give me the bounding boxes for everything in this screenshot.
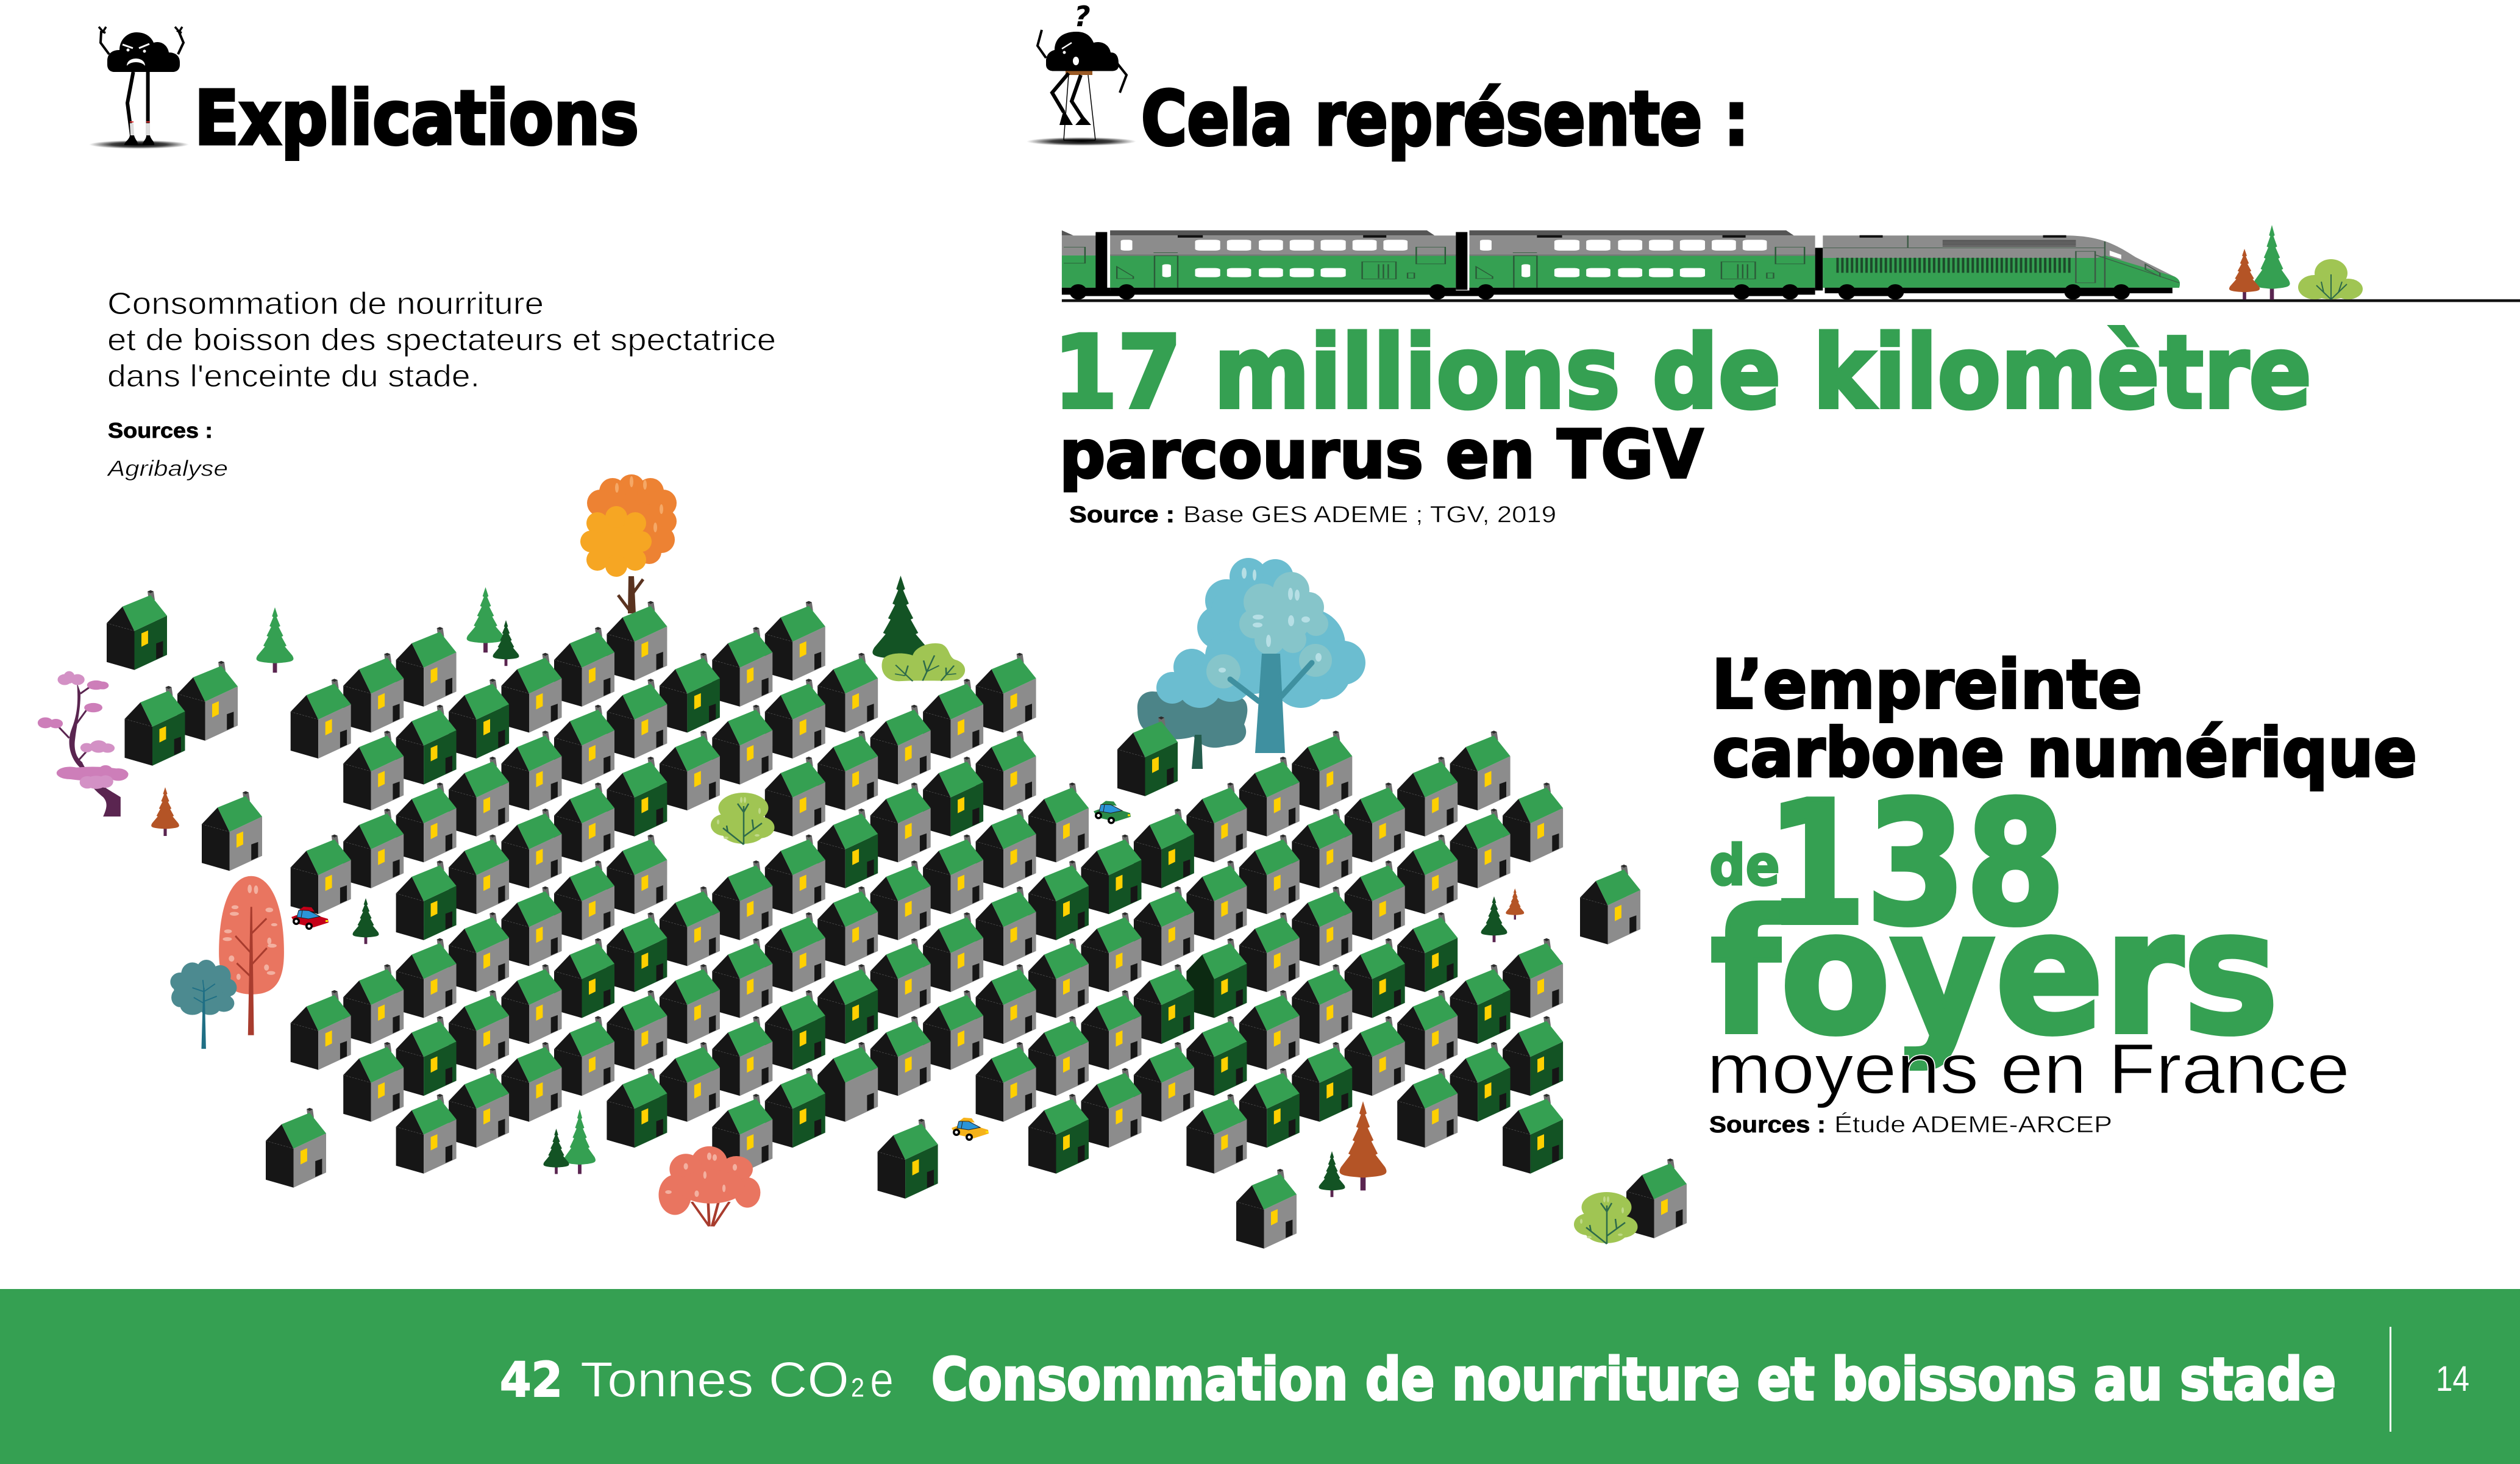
footer: value: 42: [500, 1353, 563, 1408]
source: TGV: [1069, 502, 1556, 528]
footer bar: [0, 1289, 2520, 1464]
source: ADEME-ARCEP: [1709, 1112, 2112, 1138]
character: questioning cloud: ?: [1074, 0, 1091, 33]
footer: value: e: [870, 1352, 894, 1407]
heading: L'empreinte carbone numérique: carbone numérique: [1712, 714, 2417, 793]
text block: explanation: Consommation de nourriture: [107, 286, 544, 321]
car: green: [1094, 801, 1131, 824]
subheading: moyens en France: moyens en France: [1707, 1029, 2350, 1109]
tree: orange: [580, 474, 677, 613]
heading: L'empreinte carbone numérique: L’empreinte: [1712, 646, 2142, 724]
tree: pink bonsai: [38, 671, 128, 816]
text block: explanation: [107, 286, 776, 480]
footer: page number: 14: [2436, 1359, 2469, 1399]
big number: de 138 foyers: 138: [1767, 765, 2065, 963]
source: ADEME-ARCEP: Sources :: [1709, 1112, 1826, 1138]
text block: explanation: et de boisson des spectateurs et spectatrice: [107, 322, 776, 357]
bush: green bottom right: [1574, 1192, 1637, 1244]
village: trees behind houses: [151, 474, 1524, 1197]
village: isolated houses: [107, 590, 1640, 944]
character: questioning cloud: [1027, 0, 1136, 146]
footer: value: [500, 1352, 894, 1408]
bush: green behind dark pine: [882, 643, 965, 681]
heading: Cela représente: Cela représente :: [1141, 76, 1749, 162]
village: house grid: [266, 601, 1687, 1249]
bush by the train: [2298, 259, 2363, 299]
text block: explanation: dans l'enceinte du stade.: [107, 359, 480, 393]
bush: coral: [658, 1146, 760, 1226]
big number: de 138 foyers: [1709, 765, 2279, 1072]
bush: green in the village gap: [711, 793, 774, 844]
car: yellow: [952, 1118, 989, 1141]
text block: explanation: Agribalyse: [107, 456, 228, 480]
footer: value: 2: [851, 1373, 864, 1402]
character: angry cloud: [89, 27, 189, 149]
footer: value: Tonnes CO: [580, 1352, 849, 1407]
source: TGV: Source :: [1069, 502, 1175, 528]
train illustration: [1062, 230, 2520, 302]
tree: teal: [170, 960, 237, 1049]
big number: de 138 foyers: de: [1709, 833, 1780, 898]
source: TGV: Base GES ADEME ; TGV, 2019: [1183, 502, 1556, 528]
train body: [1062, 230, 2180, 299]
trees beside the train: [2229, 225, 2363, 299]
heading: L'empreinte carbone numérique: [1712, 646, 2417, 793]
subheading: parcourus en TGV: parcourus en TGV: [1059, 416, 1703, 493]
heading: Explications: Explications: [194, 75, 639, 162]
text block: explanation: Sources :: [108, 419, 213, 443]
source: ADEME-ARCEP: Étude ADEME-ARCEP: [1834, 1112, 2112, 1138]
rail line: [1062, 299, 2520, 302]
big number: 17 millions de kilomètre: 17 millions de kilomètre: [1053, 314, 2312, 431]
big number: de 138 foyers: foyers: [1710, 874, 2279, 1072]
tree: blue: [1137, 558, 1365, 769]
pines: [151, 576, 1524, 1197]
tree: coral: [219, 876, 284, 1035]
car: red: [291, 907, 329, 930]
